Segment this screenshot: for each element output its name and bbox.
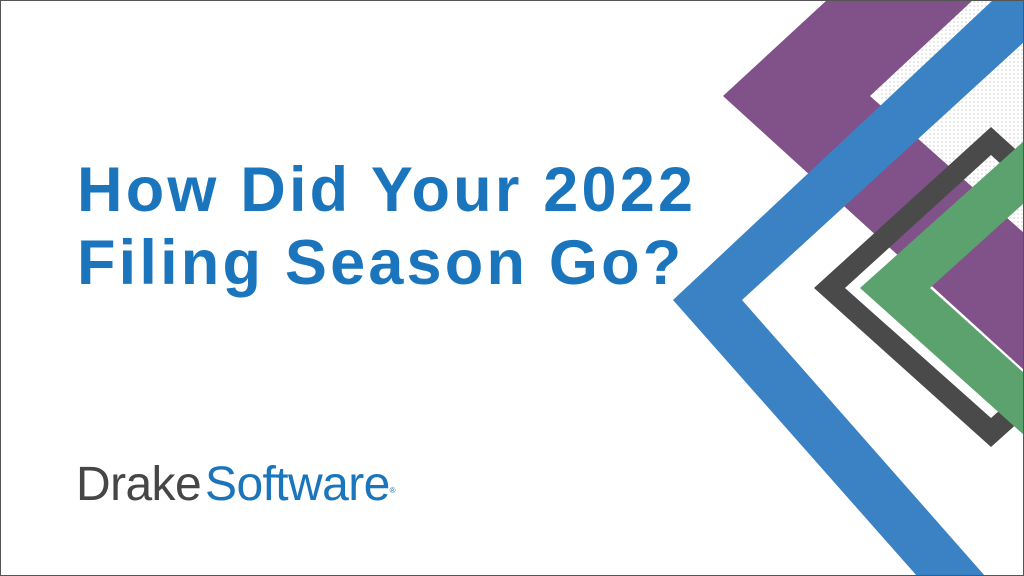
gray diamond outline xyxy=(814,127,1024,447)
logo: DrakeSoftware® xyxy=(76,458,395,511)
blue chevron xyxy=(673,0,1024,576)
green chevron xyxy=(860,141,1024,435)
title: How Did Your 2022 xyxy=(77,155,696,225)
purple chevron band xyxy=(723,0,1024,370)
title: Filing Season Go? xyxy=(77,228,684,298)
halftone background xyxy=(820,0,1024,240)
title xyxy=(77,155,696,298)
